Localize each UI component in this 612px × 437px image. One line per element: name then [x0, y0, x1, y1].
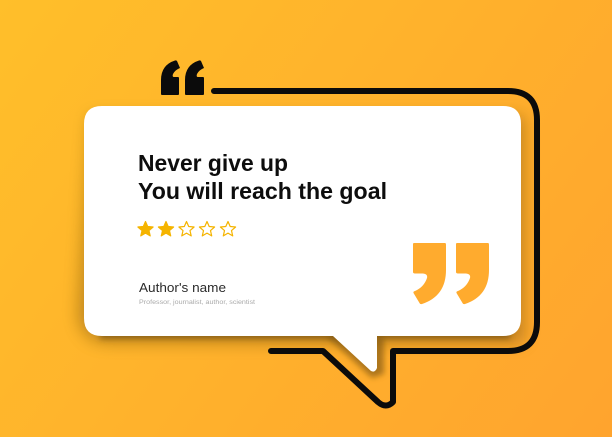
- heading: Never give up: [138, 150, 288, 176]
- black speech bubble outline: [214, 91, 537, 406]
- author name: Author's name: [139, 280, 226, 295]
- card wide shadow: [78, 116, 524, 343]
- empty star 4: [199, 222, 215, 236]
- card tight shadow: [100, 300, 510, 339]
- white card with tail: [84, 106, 521, 372]
- icon: orange closing quote mark: [413, 243, 489, 304]
- star rating: [138, 222, 236, 236]
- heading: [138, 150, 387, 204]
- heading: You will reach the goal: [138, 178, 387, 204]
- empty star 5: [220, 222, 236, 236]
- filled star 2: [158, 222, 174, 236]
- tail shadow: [326, 336, 384, 378]
- author role: Professor, journalist, author, scientist: [139, 299, 255, 306]
- empty star 3: [179, 222, 194, 236]
- icon: black opening quote mark: [161, 60, 204, 95]
- filled star 1: [138, 222, 153, 236]
